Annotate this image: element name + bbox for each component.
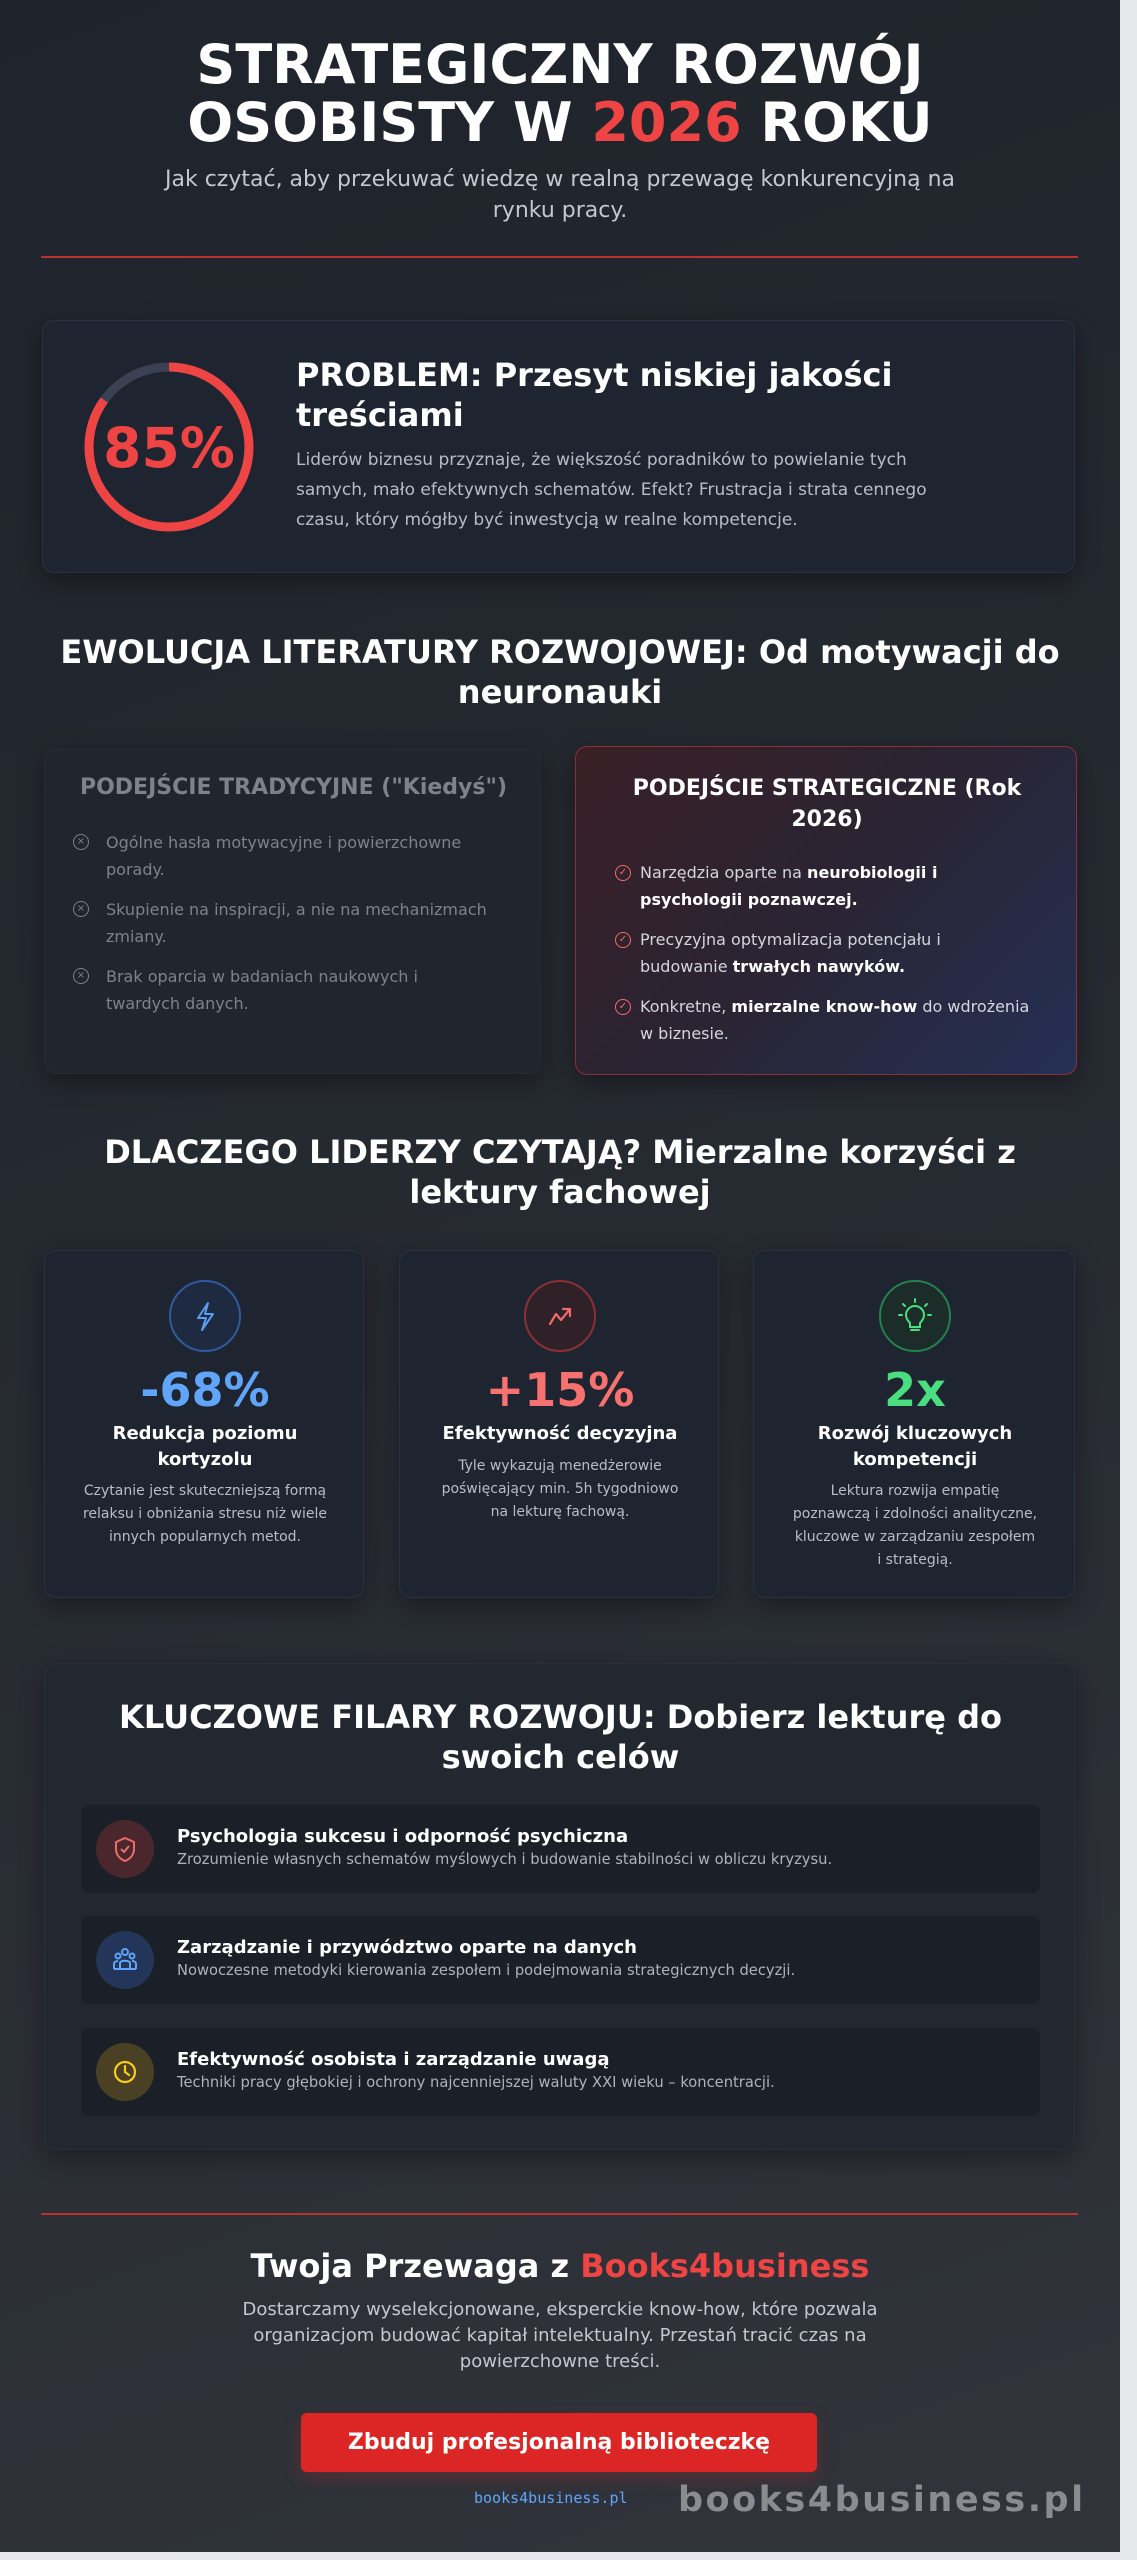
- icon: bulb: [879, 1280, 951, 1352]
- pillar text: Efektywność osobista i zarządzanie uwagą: [177, 2049, 609, 2070]
- heading: why leaders read: DLACZEGO LIDERZY CZYTAJĄ? Mierzalne korzyści z lektury fachowej: [104, 1133, 1016, 1211]
- description: poznawczą i zdolności analityczne,: [793, 1506, 1037, 1522]
- strategic list: ✓: [619, 1001, 627, 1012]
- strategic list: Precyzyjna optymalizacja potencjału i: [640, 930, 941, 949]
- pillar text: [176, 2049, 775, 2091]
- description: Czytanie jest skuteczniejszą formą: [84, 1483, 326, 1499]
- description: poświęcający min. 5h tygodniowo: [442, 1481, 678, 1497]
- icon: team: [96, 1931, 154, 1989]
- strategic list: ✓: [619, 867, 627, 878]
- title: [187, 32, 933, 154]
- description: relaksu i obniżania stresu niż wiele: [83, 1506, 327, 1522]
- traditional list: ×: [77, 970, 85, 981]
- icon: trend: [524, 1280, 596, 1352]
- traditional list: Brak oparcia w badaniach naukowych i twardych danych.: [106, 967, 418, 1013]
- description: [442, 1458, 678, 1520]
- description: Lektura rozwija empatię: [831, 1483, 999, 1499]
- description: i strategią.: [877, 1552, 953, 1568]
- description: [83, 1483, 327, 1545]
- pillar text: Nowoczesne metodyki kierowania zespołem i podejmowania strategicznych decyzji.: [177, 1962, 795, 1979]
- strategic list: ✓: [619, 934, 627, 945]
- number: 2x: [884, 1363, 946, 1417]
- pillar: efficiency: [81, 2028, 1040, 2116]
- description: kluczowe w zarządzaniu zespołem: [795, 1529, 1035, 1545]
- panel: problem: [42, 320, 1075, 573]
- pillar text: [177, 1937, 795, 1979]
- panel: strategic: [575, 746, 1077, 1075]
- problem text: [296, 450, 927, 530]
- subtitle: Jak czytać, aby przekuwać wiedzę w realną przewagę konkurencyjną na rynku pracy.: [165, 167, 955, 223]
- number: +15%: [486, 1363, 634, 1417]
- icon: clock: [96, 2043, 154, 2101]
- description: innych popularnych metod.: [109, 1529, 301, 1545]
- button: CTA: Zbuduj profesjonalną biblioteczkę: [348, 2430, 770, 2455]
- chart: 85% ring: [84, 362, 254, 532]
- number: -68%: [140, 1363, 270, 1417]
- footer text: Dostarczamy wyselekcjonowane, eksperckie know-how, które pozwala organizacjom budować kapitał intelektualny. Przestań tracić czas na powierzchowne treści.: [242, 2299, 878, 2372]
- panel: pillars: [44, 1663, 1075, 2150]
- strategic list: budowanie trwałych nawyków.: [640, 957, 905, 976]
- problem text: Liderów biznesu przyznaje, że większość poradników to powielanie tych: [296, 450, 907, 470]
- pillar text: Techniki pracy głębokiej i ochrony najcenniejszej waluty XXI wieku – koncentracji.: [177, 2074, 775, 2091]
- description: na lekturę fachową.: [491, 1504, 629, 1520]
- strategic heading: PODEJŚCIE STRATEGICZNE (Rok 2026): [633, 776, 1021, 832]
- watermark: books4business.pl: [678, 2480, 1086, 2520]
- icon: lightning: [169, 1280, 241, 1352]
- strategic list: psychologii poznawczej.: [640, 890, 858, 909]
- pillar text: Psychologia sukcesu i odporność psychiczna: [177, 1826, 628, 1847]
- traditional list: [73, 833, 487, 1013]
- footer heading: Twoja Przewaga z Books4business: [251, 2247, 869, 2285]
- chart: 85% ring: 85%: [103, 416, 235, 480]
- panel: stat cortisol: [44, 1250, 364, 1598]
- heading: evolution: EWOLUCJA LITERATURY ROZWOJOWEJ: Od motywacji do neuronauki: [60, 633, 1060, 711]
- description: Tyle wykazują menedżerowie: [458, 1458, 662, 1474]
- problem text: czasu, który mógłby być inwestycją w realne kompetencje.: [296, 510, 798, 530]
- pillar: management: [81, 1916, 1040, 2004]
- pillar text: Zarządzanie i przywództwo oparte na danych: [177, 1937, 637, 1958]
- description: [793, 1483, 1037, 1568]
- traditional list: Skupienie na inspiracji, a nie na mechanizmach zmiany.: [106, 900, 487, 946]
- label: Efektywność decyzyjna: [443, 1423, 677, 1444]
- link: books4business.pl: [474, 2489, 628, 2507]
- pillars heading: KLUCZOWE FILARY ROZWOJU: Dobierz lekturę do swoich celów: [119, 1698, 1002, 1776]
- traditional heading: PODEJŚCIE TRADYCYJNE ("Kiedyś"): [80, 775, 507, 800]
- label: Redukcja poziomu kortyzolu: [113, 1423, 297, 1470]
- strategic list: Narzędzia oparte na neurobiologii i: [640, 863, 937, 882]
- button: CTA: [301, 2413, 817, 2472]
- traditional list: ×: [77, 903, 85, 914]
- icon: shield: [96, 1820, 154, 1878]
- panel: traditional: [44, 748, 541, 1074]
- problem text: samych, mało efektywnych schematów. Efekt? Frustracja i strata cennego: [296, 480, 927, 500]
- strategic list: Konkretne, mierzalne know-how do wdrożenia: [640, 997, 1029, 1016]
- traditional list: Ogólne hasła motywacyjne i powierzchowne porady.: [106, 833, 461, 879]
- pillar text: Zrozumienie własnych schematów myślowych i budowanie stabilności w obliczu kryzysu.: [177, 1851, 832, 1868]
- title: OSOBISTY W 2026 ROKU: [187, 91, 933, 154]
- problem heading: PROBLEM: Przesyt niskiej jakości treściami: [296, 356, 892, 434]
- panel: stat decisions: [399, 1250, 719, 1598]
- strategic list: [615, 863, 1029, 1043]
- pillar: psychology: [81, 1805, 1040, 1893]
- panel: stat competences: [753, 1250, 1075, 1598]
- pillar text: [177, 1826, 832, 1868]
- traditional list: ×: [77, 836, 85, 847]
- label: Rozwój kluczowych kompetencji: [818, 1423, 1012, 1470]
- title: STRATEGICZNY ROZWÓJ: [196, 33, 924, 96]
- strategic list: w biznesie.: [640, 1024, 729, 1043]
